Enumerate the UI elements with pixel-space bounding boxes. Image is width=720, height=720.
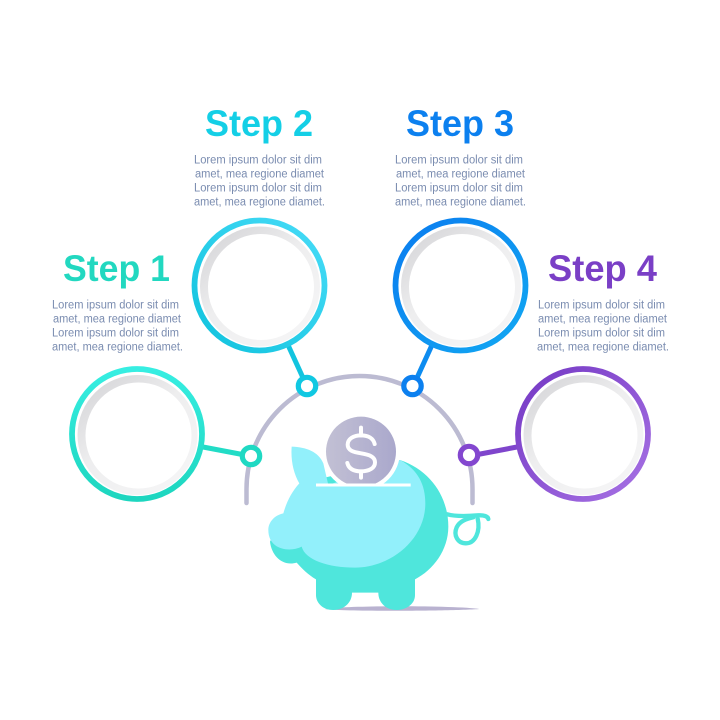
pig body	[270, 460, 448, 610]
empty circle: step 1	[72, 369, 202, 499]
text block: step 2: amet, mea regione diamet.	[194, 196, 325, 208]
panel: step 4	[460, 248, 669, 499]
node: step 3	[404, 377, 421, 395]
heading: step 2: Step 2	[205, 103, 313, 144]
pig tail	[447, 514, 488, 543]
text block: step 4: amet, mea regione diamet.	[537, 342, 669, 354]
heading: step 1: Step 1	[63, 248, 170, 289]
text block: step 3: Lorem ipsum dolor sit dim	[395, 182, 523, 194]
connector: step 3	[416, 345, 432, 380]
panel: step 2	[194, 103, 325, 395]
coin	[326, 416, 399, 484]
text block: step 3: amet, mea regione diamet.	[395, 196, 526, 208]
icon: piggy bank	[268, 413, 488, 611]
connector: step 2	[288, 345, 304, 380]
text block: step 4: Lorem ipsum dolor sit dim	[538, 328, 665, 340]
text block: step 1: amet, mea regione diamet.	[52, 342, 183, 354]
empty circle: step 4	[518, 369, 648, 499]
text block: step 3: Lorem ipsum dolor sit dim	[395, 154, 523, 166]
pig body highlight	[268, 447, 425, 568]
text block: step 4: amet, mea regione diamet	[538, 314, 668, 326]
node: step 4	[460, 446, 478, 464]
text block: step 1: Lorem ipsum dolor sit dim	[52, 300, 179, 312]
panel: step 1	[52, 248, 260, 499]
text block: step 4: Lorem ipsum dolor sit dim	[538, 300, 665, 312]
connector: step 4	[475, 447, 517, 455]
arc around piggy bank	[246, 376, 472, 503]
connector: step 1	[203, 447, 245, 455]
text block: step 2: amet, mea regione diamet	[195, 168, 325, 180]
coin slot	[316, 480, 411, 489]
empty circle: step 2	[194, 220, 324, 350]
heading: step 4: Step 4	[548, 248, 657, 289]
node: step 1	[242, 447, 260, 465]
panel: step 3	[395, 103, 526, 395]
heading: step 3: Step 3	[406, 103, 514, 144]
dollar sign	[347, 428, 375, 478]
text block: step 1: amet, mea regione diamet	[53, 314, 182, 326]
text block: step 1: Lorem ipsum dolor sit dim	[52, 328, 179, 340]
node: step 2	[298, 377, 316, 395]
text block: step 2: Lorem ipsum dolor sit dim	[194, 154, 322, 166]
pig shadow	[325, 606, 479, 611]
empty circle: step 3	[396, 220, 526, 350]
text block: step 3: amet, mea regione diamet	[396, 168, 526, 180]
infographic	[52, 110, 668, 611]
text block: step 2: Lorem ipsum dolor sit dim	[194, 182, 322, 194]
